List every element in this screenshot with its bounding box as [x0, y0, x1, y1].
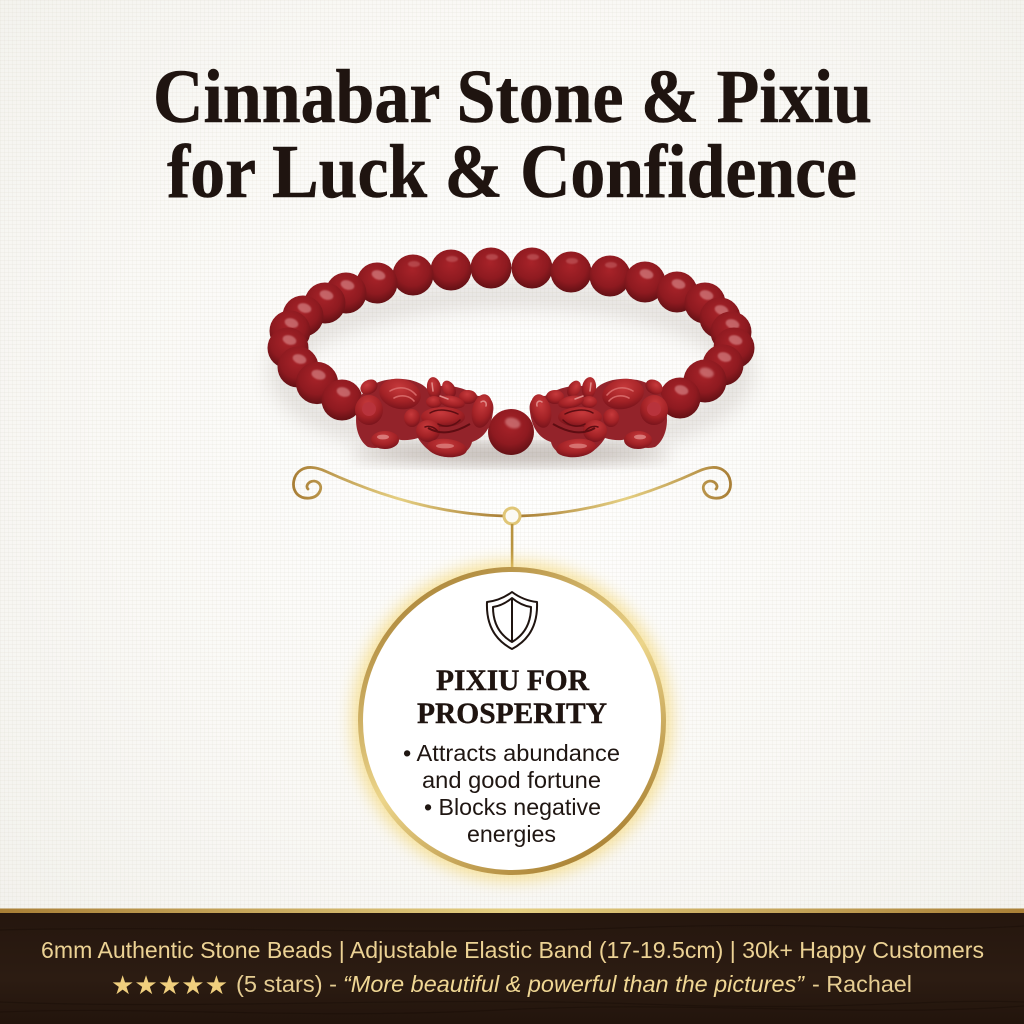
title: Cinnabar Stone & Pixiu [153, 55, 872, 139]
title: for Luck & Confidence [167, 130, 857, 214]
title [153, 55, 872, 214]
ornament: gold scroll connector [294, 467, 730, 516]
panel heading: PIXIU FOR [436, 664, 589, 697]
bracelet [268, 248, 754, 464]
connector stem [511, 524, 513, 568]
beads [268, 248, 754, 455]
footer testimonial: “More beautiful & powerful than the pictures” [343, 971, 805, 997]
footer band [0, 908, 1024, 1024]
footer specs text: 6mm Authentic Stone Beads | Adjustable Elastic Band (17-19.5cm) | 30k+ Happy Customers [41, 937, 984, 963]
panel bullet text: • Blocks negative [424, 794, 601, 820]
panel bullet text [403, 740, 620, 847]
footer rating label: (5 stars) - [236, 971, 337, 997]
footer gold rule [0, 908, 1024, 913]
footer attribution: - Rachael [812, 971, 912, 997]
panel heading [417, 664, 607, 730]
icon: shield [487, 592, 537, 649]
pixiu charm right [528, 375, 668, 459]
panel heading: PROSPERITY [417, 697, 607, 730]
panel: pixiu for prosperity [352, 561, 672, 881]
pixiu charm left [355, 375, 495, 459]
panel bullet text: energies [467, 821, 556, 847]
panel bullet text: • Attracts abundance [403, 740, 620, 766]
footer star rating: ★★★★★ [111, 971, 228, 1001]
connector node [504, 508, 520, 524]
panel bullet text: and good fortune [422, 767, 601, 793]
